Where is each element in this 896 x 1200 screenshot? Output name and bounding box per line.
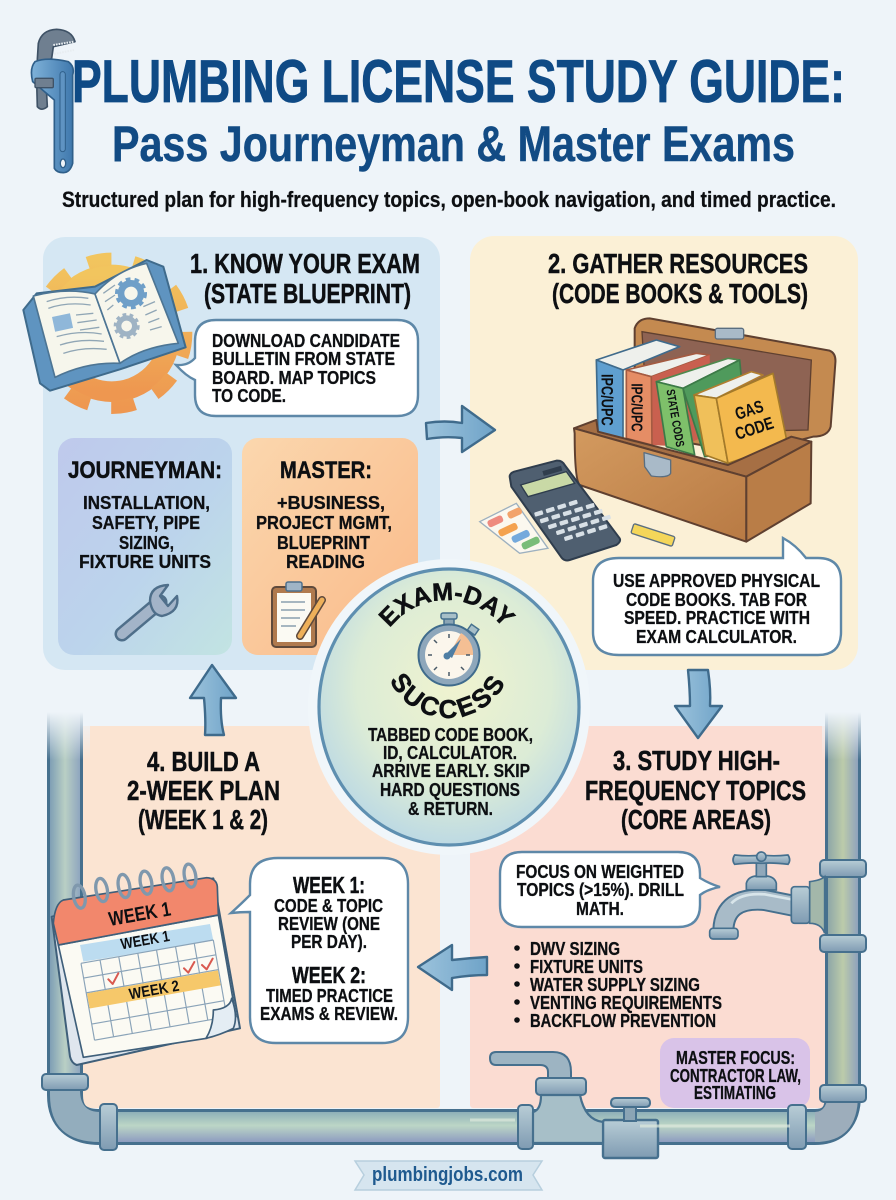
list: high-frequency topics: WATER SUPPLY SIZING — [530, 974, 700, 995]
callout: weekly plan: CODE & TOPIC — [274, 895, 383, 916]
callout: focus on weighted topics: FOCUS ON WEIGHTED — [516, 861, 684, 882]
arrow: step 3 to step 4 — [418, 945, 487, 990]
list: high-frequency topics — [514, 938, 722, 1031]
panel: master: READING — [286, 551, 365, 572]
heading: step 1: 1. KNOW YOUR EXAM — [190, 248, 420, 279]
panel: step 3 study topics — [470, 726, 830, 1108]
panel: journeyman: FIXTURE UNITS — [79, 551, 211, 572]
book: IPC/UPC blue — [596, 340, 680, 438]
callout: weekly plan: TIMED PRACTICE — [266, 985, 393, 1006]
panel: step 1 know your exam — [23, 237, 440, 670]
footer ribbon: plumbingjobs.com — [372, 1164, 523, 1186]
text: exam-day checklist: & RETURN. — [408, 798, 493, 819]
pipe frame — [42, 712, 868, 1158]
heading: step 4: (WEEK 1 & 2) — [138, 804, 268, 835]
list: high-frequency topics: VENTING REQUIREMENTS — [530, 992, 722, 1013]
list: high-frequency topics: BACKFLOW PREVENTION — [530, 1010, 716, 1031]
callout: weekly plan — [231, 858, 408, 1043]
text: exam-day checklist: TABBED CODE BOOK, — [368, 724, 533, 745]
panel: journeyman — [58, 438, 232, 655]
panel: journeyman: JOURNEYMAN: — [68, 457, 222, 484]
icon: toolbox with code books — [480, 318, 835, 560]
panel: step 4 build a plan — [78, 726, 440, 1108]
panel: master — [242, 438, 418, 655]
callout: weekly plan: EXAMS & REVIEW. — [260, 1003, 398, 1024]
icon: faucet — [710, 852, 825, 939]
book: state code green: STATE CODS — [663, 388, 687, 448]
callout: master focus — [660, 1038, 810, 1108]
callout: focus on weighted topics: MATH. — [576, 898, 624, 919]
panel: step 2 gather resources — [470, 236, 858, 670]
heading: step 3: FREQUENCY TOPICS — [585, 775, 806, 806]
icon: open book with gears — [23, 259, 186, 407]
heading: step 1: (STATE BLUEPRINT) — [204, 278, 411, 309]
callout: weekly plan: PER DAY). — [291, 931, 367, 952]
circle: exam-day success — [309, 560, 589, 854]
icon: clipboard — [272, 582, 322, 647]
callout: weekly plan: WEEK 1: — [293, 872, 365, 898]
list: high-frequency topics: FIXTURE UNITS — [530, 956, 643, 977]
callout: download bulletin: DOWNLOAD CANDIDATE — [212, 330, 400, 351]
title — [72, 48, 845, 172]
icon: calendar: WEEK 1 — [107, 898, 173, 931]
list: high-frequency topics: DWV SIZING — [530, 938, 620, 959]
callout: focus on weighted topics — [500, 852, 720, 927]
callout: use approved books: CODE BOOKS. TAB FOR — [626, 589, 807, 610]
callout: use approved books: SPEED. PRACTICE WITH — [624, 607, 810, 628]
book: state code green — [656, 358, 748, 457]
arrow: step 4 to step 1 — [190, 665, 236, 735]
callout: weekly plan: REVIEW (ONE — [278, 913, 380, 934]
panel: journeyman: SIZING, — [119, 532, 174, 553]
text: exam-day checklist: ID, CALCULATOR. — [383, 742, 517, 763]
panel: master: MASTER: — [280, 457, 372, 484]
heading: step 4: 4. BUILD A — [147, 746, 260, 777]
icon: stopwatch — [418, 613, 480, 686]
text: exam-day checklist: ARRIVE EARLY. SKIP — [372, 760, 530, 781]
heading: step 2: 2. GATHER RESOURCES — [548, 248, 808, 279]
callout: master focus: MASTER FOCUS: — [676, 1047, 795, 1068]
arrow: step 2 to step 3 — [675, 670, 722, 738]
callout: download bulletin: TO CODE. — [212, 385, 286, 406]
book: gas code yellow: GAS — [732, 396, 766, 424]
heading: step 3: (CORE AREAS) — [621, 804, 771, 835]
icon: pipe wrench — [31, 29, 75, 173]
text: exam-day checklist: HARD QUESTIONS — [380, 779, 520, 800]
icon: valve and drain stub — [490, 1052, 650, 1143]
icon: yellow tab — [631, 524, 675, 546]
heading: step 3: 3. STUDY HIGH- — [613, 745, 780, 776]
book: IPC/UPC blue: IPC/UPC — [597, 374, 616, 426]
callout: master focus: ESTIMATING — [694, 1082, 776, 1103]
icon: calendar: WEEK 1 — [119, 928, 171, 953]
panel: master: +BUSINESS, — [277, 492, 385, 513]
icon: wrench — [122, 585, 177, 634]
icon: tab stickers — [480, 503, 548, 553]
panel: master: BLUEPRINT — [277, 532, 371, 553]
text: exam-day checklist — [368, 724, 533, 819]
heading: step 4 — [127, 746, 280, 835]
callout: master focus: CONTRACTOR LAW, — [670, 1065, 801, 1086]
book: gas code yellow — [694, 372, 787, 463]
heading: step 2 — [548, 248, 808, 309]
icon: calculator — [510, 461, 620, 560]
book: IPC/UPC red — [626, 353, 711, 447]
book: gas code yellow: CODE — [732, 413, 776, 444]
curved heading: success: SUCCESS — [392, 674, 504, 718]
callout: download bulletin — [176, 320, 418, 416]
heading: step 1 — [190, 248, 420, 309]
icon: calendar — [52, 863, 240, 1065]
callout: weekly plan: WEEK 2: — [292, 962, 366, 988]
footer ribbon — [355, 1161, 542, 1190]
heading: step 3 — [585, 745, 806, 835]
callout: focus on weighted topics: TOPICS (>15%). DRILL — [517, 879, 684, 900]
icon: calendar: WEEK 2 — [128, 978, 181, 1003]
callout: download bulletin: BOARD. MAP TOPICS — [212, 367, 376, 388]
curved heading: exam-day: EXAM-DAY — [378, 582, 516, 627]
panel: journeyman: SAFETY, PIPE — [92, 512, 200, 533]
callout: use approved books: EXAM CALCULATOR. — [636, 626, 797, 647]
heading: step 4: 2-WEEK PLAN — [127, 775, 280, 806]
heading: step 2: (CODE BOOKS & TOOLS) — [552, 278, 808, 309]
panel: master: PROJECT MGMT, — [256, 512, 392, 533]
panel: journeyman: INSTALLATION, — [83, 492, 210, 513]
callout: download bulletin: BULLETIN FROM STATE — [212, 348, 395, 369]
arrow: step 1 to step 2 — [426, 406, 495, 452]
callout: use approved books — [593, 538, 841, 655]
book: IPC/UPC red: IPC/UPC — [627, 383, 644, 432]
callout: use approved books: USE APPROVED PHYSICAL — [613, 570, 820, 591]
